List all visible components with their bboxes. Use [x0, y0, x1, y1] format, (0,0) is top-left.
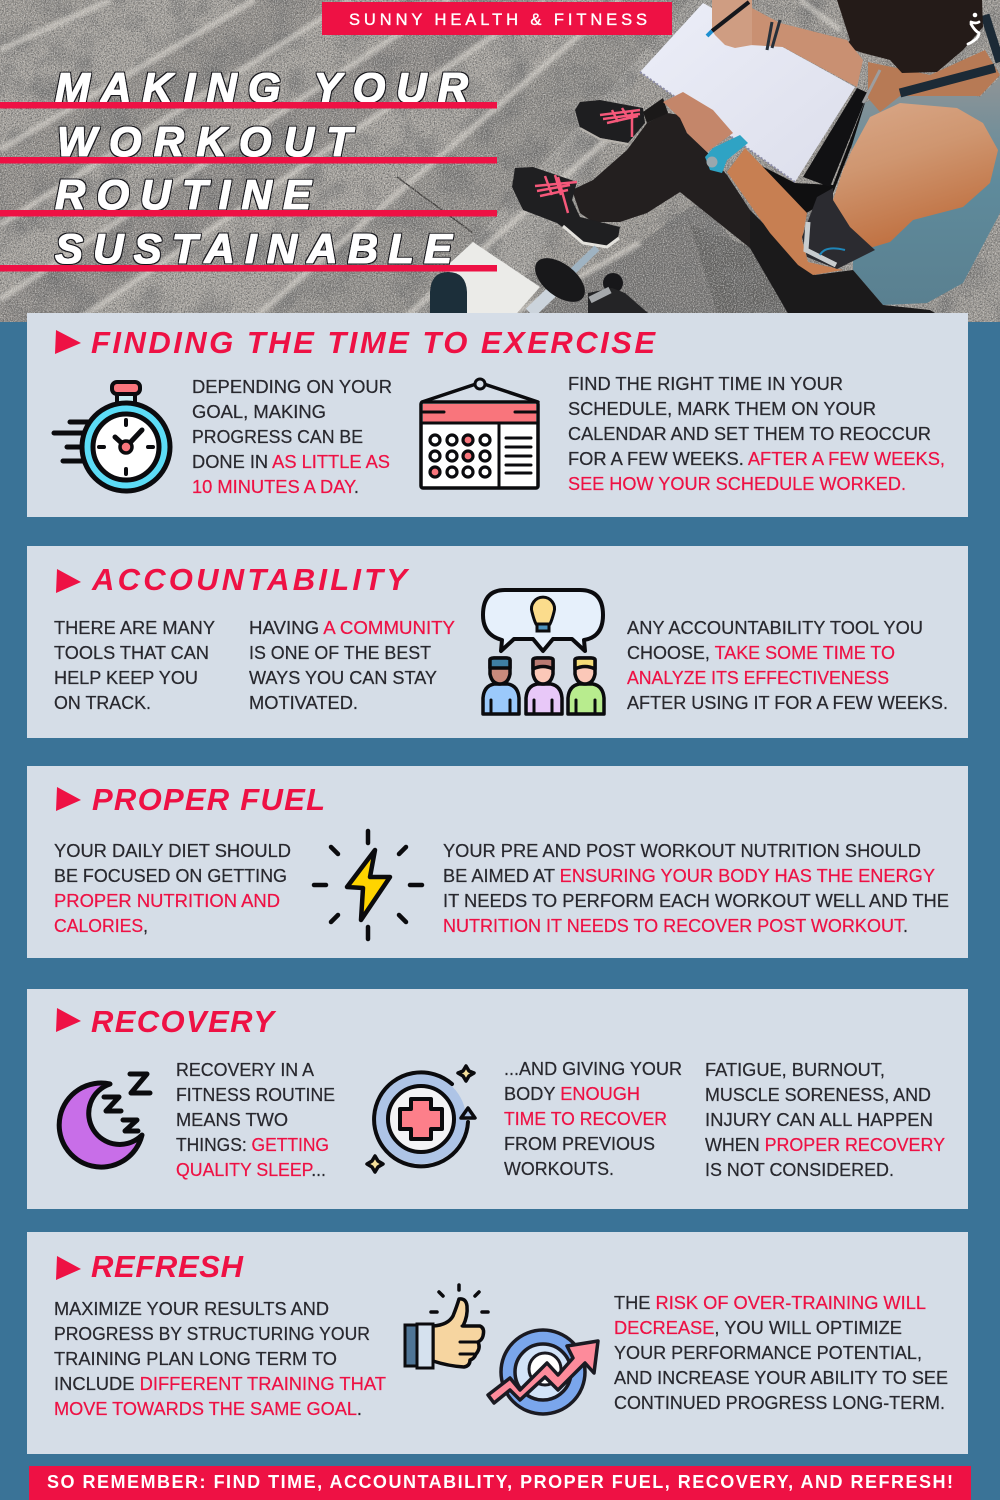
blue watch — [705, 135, 748, 173]
upper shoe — [575, 100, 645, 144]
back shoulder — [833, 103, 998, 250]
text: recovery two things: THINGS: GETTING — [176, 1135, 329, 1155]
text: pre and post workout: YOUR PRE AND POST WORKOUT NUTRITION SHOULD — [443, 841, 921, 861]
text: pre and post workout — [443, 841, 949, 936]
text: recovery two things: FITNESS ROUTINE — [176, 1085, 335, 1105]
title: WORKOUT — [57, 118, 355, 165]
shin and knee leggings — [572, 113, 750, 248]
heading: recovery: RECOVERY — [91, 1004, 277, 1039]
text: find the right time: SCHEDULE, MARK THEM ON YOUR — [568, 399, 876, 419]
neck and upper back — [868, 50, 1000, 112]
icon: lightning bolt — [314, 831, 422, 939]
title: SUSTAINABLE — [55, 225, 454, 272]
title: MAKING YOUR — [55, 64, 469, 111]
text: community: MOTIVATED. — [249, 693, 358, 713]
text: fatigue and burnout: IS NOT CONSIDERED. — [705, 1160, 894, 1180]
text: daily diet: YOUR DAILY DIET SHOULD — [54, 841, 291, 861]
hand on knee — [663, 92, 733, 152]
text: depending on your goal: DONE IN AS LITTLE AS — [192, 452, 390, 472]
text: depending on your goal: GOAL, MAKING — [192, 402, 326, 422]
header photo: athlete writing on stone steps — [0, 0, 1000, 322]
text: many tools: THERE ARE MANY — [54, 618, 215, 638]
text: maximize your results: PROGRESS BY STRUCTURING YOUR — [54, 1324, 370, 1344]
text: many tools — [54, 618, 215, 713]
text: find the right time — [568, 374, 945, 494]
text: depending on your goal: PROGRESS CAN BE — [192, 427, 363, 447]
text: risk of over-training: AND INCREASE YOUR ABILITY TO SEE — [614, 1368, 948, 1388]
text: community — [249, 618, 455, 713]
tank top — [852, 77, 1000, 305]
icon: stopwatch — [54, 382, 170, 491]
text: daily diet: BE FOCUSED ON GETTING — [54, 866, 287, 886]
text: time to recover: FROM PREVIOUS — [504, 1134, 655, 1154]
text: fatigue and burnout: FATIGUE, BURNOUT, — [705, 1060, 885, 1080]
text: find the right time: FIND THE RIGHT TIME IN YOUR — [568, 374, 843, 394]
title — [0, 64, 497, 272]
text: many tools: TOOLS THAT CAN — [54, 643, 209, 663]
text: pre and post workout: IT NEEDS TO PERFORM EACH WORKOUT WELL AND THE — [443, 891, 949, 911]
text: community: IS ONE OF THE BEST — [249, 643, 431, 663]
armband — [802, 188, 875, 269]
title: ROUTINE — [55, 171, 313, 218]
icon: thumbs up — [405, 1285, 488, 1368]
text: find the right time: CALENDAR AND SET THEM TO REOCCUR — [568, 424, 931, 444]
logo mark — [968, 13, 979, 44]
text: risk of over-training: CONTINUED PROGRESS LONG-TERM. — [614, 1393, 945, 1413]
text: fatigue and burnout: WHEN PROPER RECOVERY — [705, 1135, 945, 1155]
icon: team with idea bubble — [483, 590, 604, 714]
lap and thigh — [750, 210, 950, 322]
heading: refresh: REFRESH — [91, 1249, 244, 1284]
text: depending on your goal: 10 MINUTES A DAY. — [192, 477, 359, 497]
closing banner: SO REMEMBER: FIND TIME, ACCOUNTABILITY, PROPER FUEL, RECOVERY, AND REFRESH! — [47, 1472, 953, 1492]
writing forearm — [750, 7, 863, 87]
lower shoe — [512, 167, 620, 247]
text: analyze effectiveness: ANALYZE ITS EFFECTIVENESS — [627, 668, 889, 688]
text: analyze effectiveness — [627, 618, 948, 713]
panel: proper fuel — [27, 766, 968, 958]
panel: finding the time to exercise — [27, 313, 968, 517]
icon: calendar — [421, 379, 538, 488]
text: risk of over-training: THE RISK OF OVER-TRAINING WILL — [614, 1293, 926, 1313]
text: pre and post workout: BE AIMED AT ENSURING YOUR BODY HAS THE ENERGY — [443, 866, 935, 886]
heading: finding the time: FINDING THE TIME TO EXERCISE — [91, 325, 656, 360]
text: recovery two things — [176, 1060, 335, 1180]
text: depending on your goal — [192, 377, 392, 497]
writing hand — [712, 0, 752, 48]
text: pre and post workout: NUTRITION IT NEEDS TO RECOVER POST WORKOUT. — [443, 916, 908, 936]
heading: proper fuel: PROPER FUEL — [92, 782, 325, 817]
pen — [707, 2, 749, 36]
hair — [837, 0, 983, 73]
panel: accountability — [27, 546, 968, 738]
text: analyze effectiveness: AFTER USING IT FOR A FEW WEEKS. — [627, 693, 948, 713]
brand banner: SUNNY HEALTH & FITNESS — [349, 11, 647, 29]
dumbbell — [527, 248, 648, 313]
icon: crescent moon with zzz — [59, 1074, 150, 1167]
text: fatigue and burnout: MUSCLE SORENESS, AND — [705, 1085, 931, 1105]
brand banner — [322, 2, 672, 35]
text: community: WAYS YOU CAN STAY — [249, 668, 437, 688]
heading: accountability: ACCOUNTABILITY — [91, 562, 410, 597]
dark folder under notebook — [803, 88, 868, 187]
icon: target with rising arrow — [488, 1330, 598, 1414]
text: time to recover: WORKOUTS. — [504, 1159, 614, 1179]
text: daily diet — [54, 841, 291, 936]
text: fatigue and burnout: INJURY CAN ALL HAPPEN — [705, 1110, 933, 1130]
tank straps — [900, 15, 1000, 93]
text: risk of over-training: DECREASE, YOU WILL OPTIMIZE — [614, 1318, 902, 1338]
text: recovery two things: MEANS TWO — [176, 1110, 288, 1130]
icon: medical cross with recovery cycle — [367, 1066, 475, 1172]
text: recovery two things: QUALITY SLEEP... — [176, 1160, 326, 1180]
text: daily diet: PROPER NUTRITION AND — [54, 891, 280, 911]
text: maximize your results: TRAINING PLAN LONG TERM TO — [54, 1349, 337, 1369]
text: recovery two things: RECOVERY IN A — [176, 1060, 314, 1080]
text: maximize your results: MOVE TOWARDS THE SAME GOAL. — [54, 1399, 362, 1419]
text: maximize your results — [54, 1299, 386, 1419]
text: time to recover: BODY ENOUGH — [504, 1084, 640, 1104]
text: analyze effectiveness: ANY ACCOUNTABILITY TOOL YOU — [627, 618, 923, 638]
text: analyze effectiveness: CHOOSE, TAKE SOME TIME TO — [627, 643, 895, 663]
bracelets — [767, 20, 780, 50]
text: many tools: ON TRACK. — [54, 693, 151, 713]
text: many tools: HELP KEEP YOU — [54, 668, 198, 688]
text: community: HAVING A COMMUNITY — [249, 618, 455, 638]
text: maximize your results: MAXIMIZE YOUR RESULTS AND — [54, 1299, 329, 1319]
towel — [450, 242, 540, 313]
text: find the right time: SEE HOW YOUR SCHEDULE WORKED. — [568, 474, 906, 494]
text: risk of over-training — [614, 1293, 948, 1413]
text: maximize your results: INCLUDE DIFFERENT TRAINING THAT — [54, 1374, 386, 1394]
text: fatigue and burnout — [705, 1060, 945, 1180]
closing banner — [29, 1466, 971, 1500]
lower forearm — [727, 148, 843, 275]
text: time to recover — [504, 1059, 682, 1179]
text: time to recover: TIME TO RECOVER — [504, 1109, 667, 1129]
text: time to recover: ...AND GIVING YOUR — [504, 1059, 682, 1079]
text: find the right time: FOR A FEW WEEKS. AFTER A FEW WEEKS, — [568, 449, 945, 469]
text: risk of over-training: YOUR PERFORMANCE POTENTIAL, — [614, 1343, 922, 1363]
panel: recovery — [27, 989, 968, 1209]
bottle — [430, 272, 467, 313]
text: daily diet: CALORIES, — [54, 916, 148, 936]
text: depending on your goal: DEPENDING ON YOUR — [192, 377, 392, 397]
panel: refresh — [27, 1232, 968, 1454]
notebook — [640, 3, 855, 182]
